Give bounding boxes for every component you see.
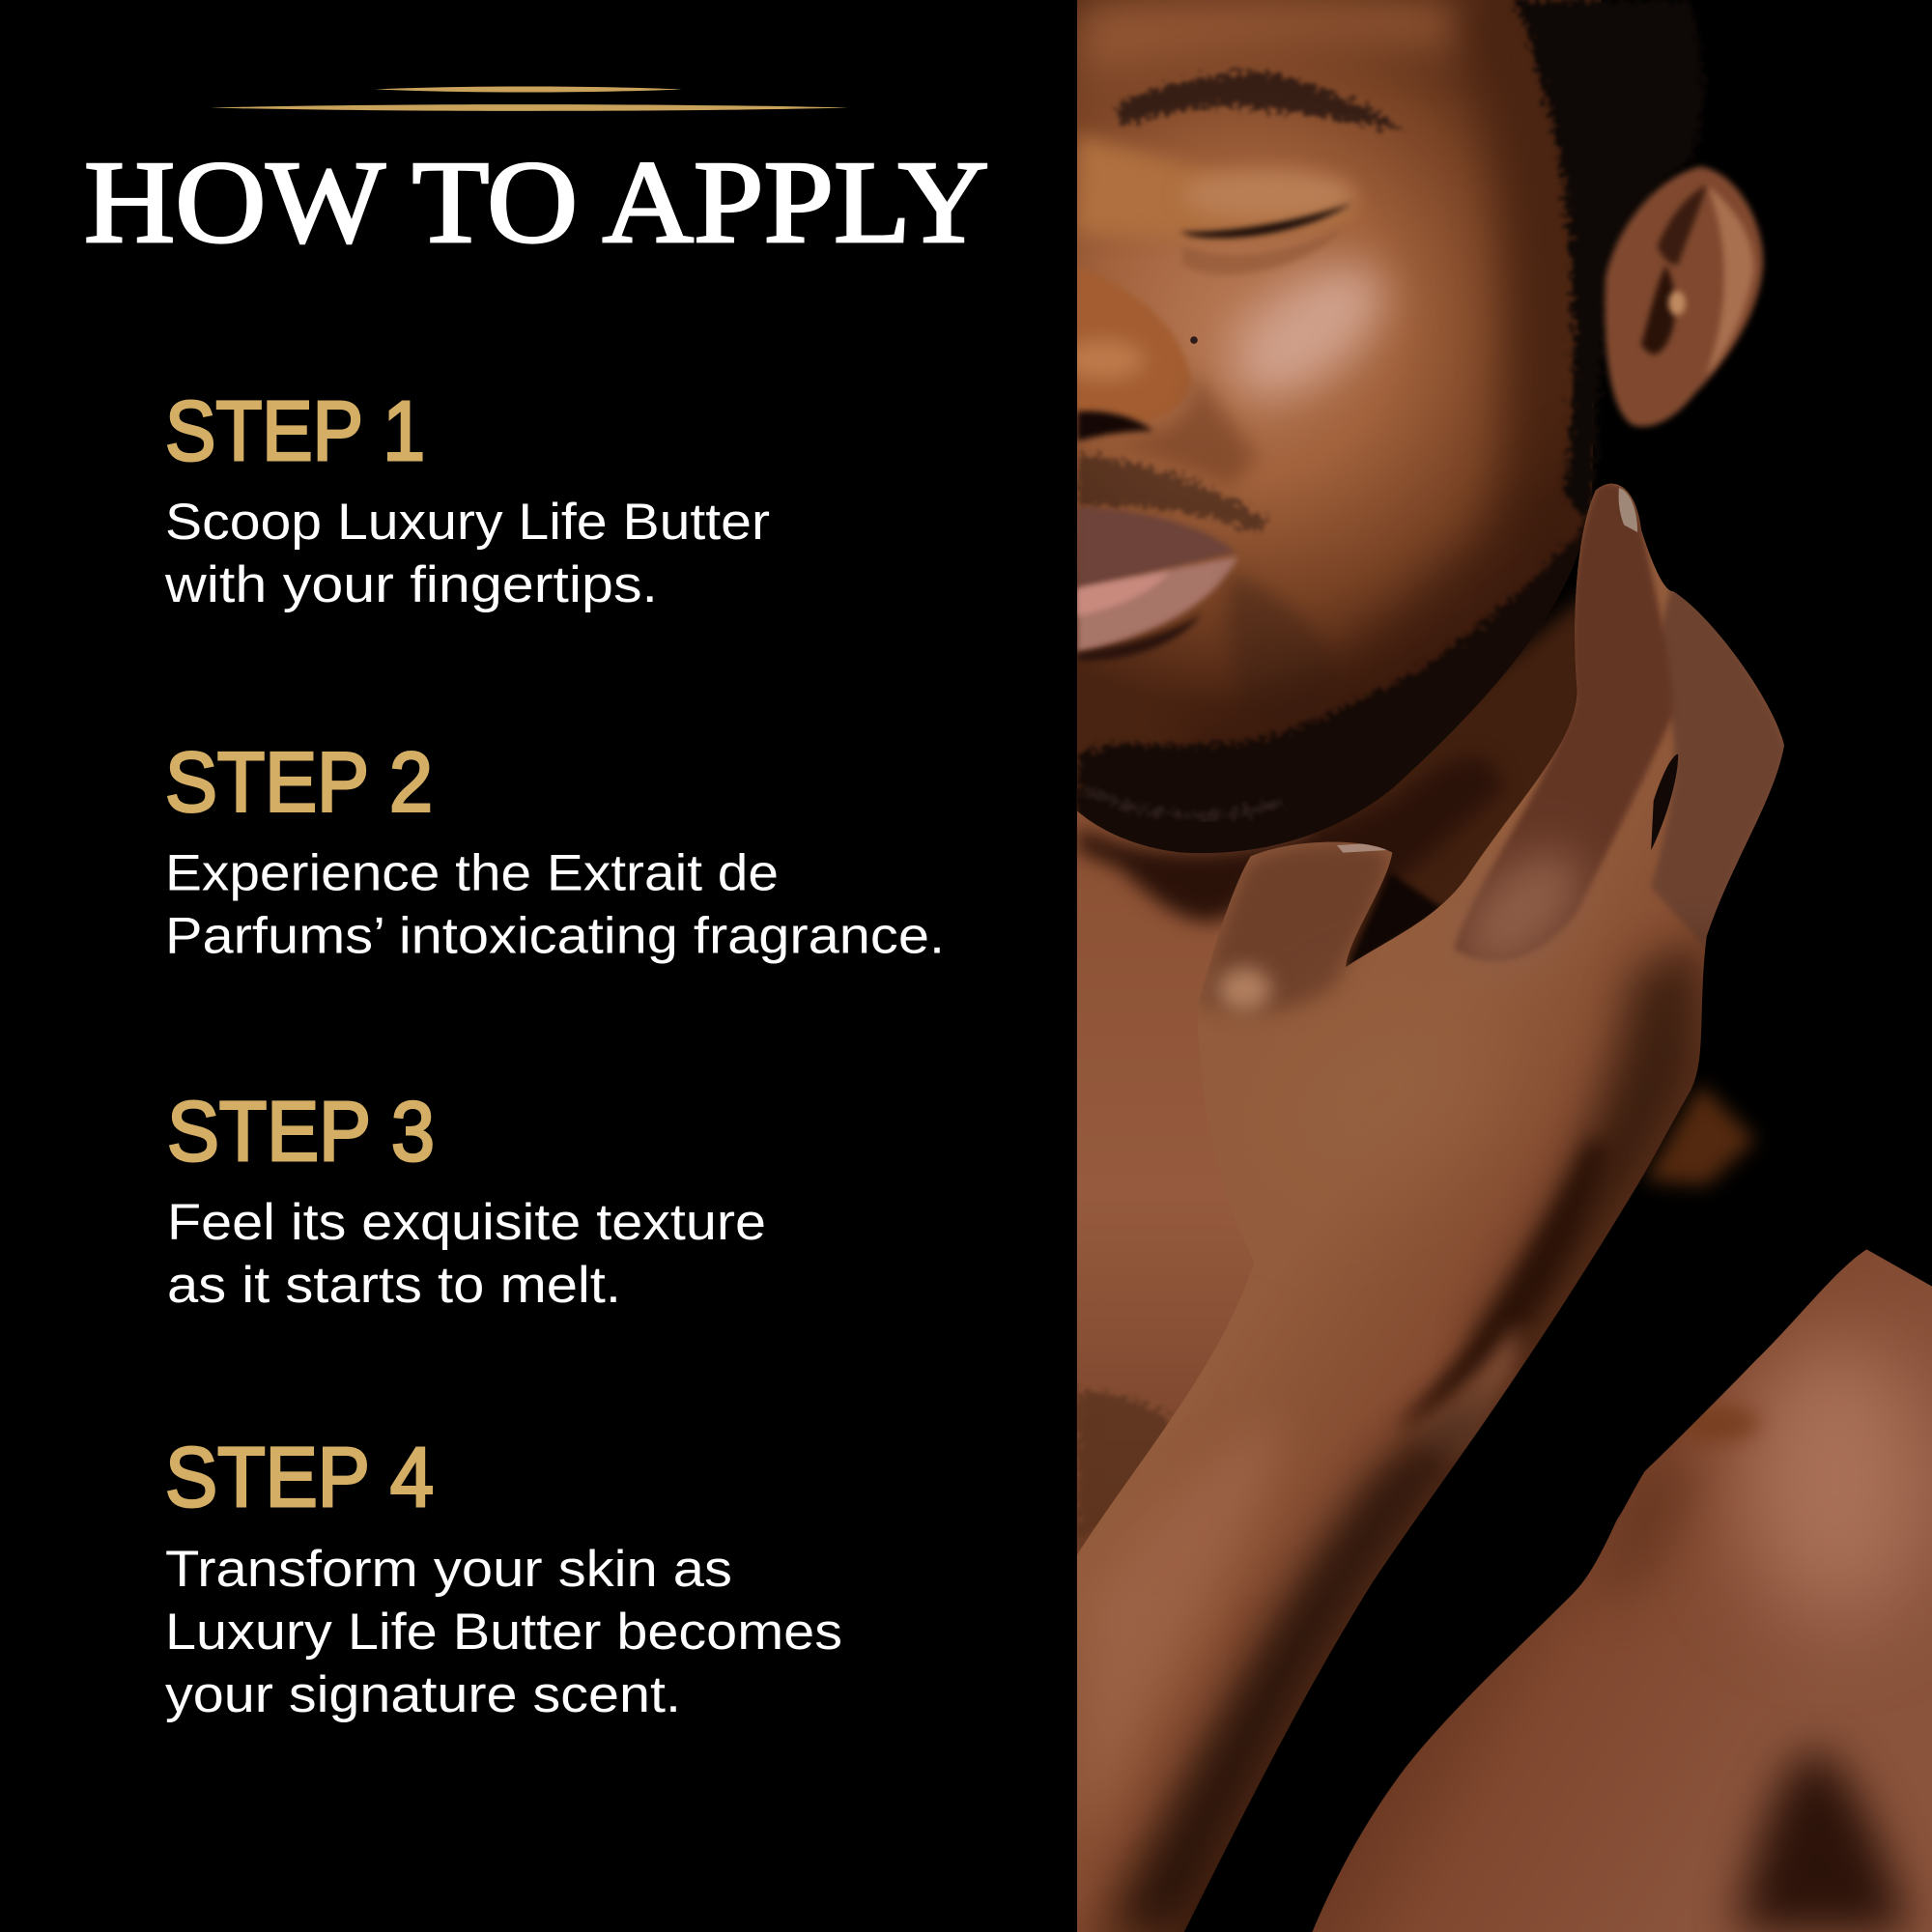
shoulder warm spot bbox=[1680, 1405, 1758, 1441]
forearm shadow side bbox=[1109, 1365, 1523, 1932]
gap between fingers bbox=[1651, 754, 1678, 850]
mole on cheek bbox=[1190, 336, 1198, 344]
step 4 text bbox=[165, 1541, 842, 1723]
step 1 heading: STEP 1 bbox=[165, 384, 425, 478]
photo: man applying butter to neck bbox=[1061, 0, 1932, 1932]
temple shade bbox=[1445, 7, 1578, 520]
fingernail bbox=[1619, 488, 1637, 532]
thumb nail bbox=[1337, 842, 1386, 853]
eyebrow bbox=[1115, 71, 1405, 130]
closed eye lash line bbox=[1180, 203, 1351, 238]
shoulder bbox=[1282, 1233, 1932, 1932]
tendon shadow bbox=[1395, 1139, 1608, 1428]
knuckle highlight bbox=[1439, 830, 1604, 994]
forehead tone bbox=[1077, 0, 1466, 86]
shoulder highlight bbox=[1740, 1337, 1932, 1620]
step 2 heading: STEP 2 bbox=[165, 736, 433, 829]
step 4 text: Transform your skin as bbox=[165, 1541, 732, 1598]
bottom gold line bbox=[211, 104, 848, 111]
brow ridge glow bbox=[1077, 130, 1206, 238]
nose highlight bbox=[1061, 340, 1145, 380]
step 4 heading: STEP 4 bbox=[165, 1431, 434, 1524]
shadow under the chin bbox=[1077, 757, 1503, 922]
step 2 text bbox=[165, 844, 945, 964]
nostril bbox=[1077, 412, 1153, 441]
step 2 text: Experience the Extrait de bbox=[165, 844, 779, 902]
step 1 text: with your fingertips. bbox=[164, 556, 658, 613]
lower lip pink tint bbox=[1077, 572, 1171, 616]
thumb bbox=[1202, 842, 1392, 1013]
chest hair bbox=[1077, 1392, 1180, 1547]
wrist bone light bbox=[1417, 1324, 1517, 1460]
forearm highlight bbox=[1077, 1417, 1282, 1848]
step 1 text bbox=[164, 494, 770, 613]
step 2 bbox=[165, 736, 945, 964]
neck in shade behind the fingers bbox=[1306, 591, 1602, 974]
step 1 text: Scoop Luxury Life Butter bbox=[165, 494, 770, 551]
step 2 text: Parfums’ intoxicating fragrance. bbox=[165, 908, 945, 964]
beard lighter hairs bbox=[1084, 788, 1282, 816]
step 3 text: Feel its exquisite texture bbox=[167, 1194, 766, 1251]
hand edge shadow bbox=[1472, 936, 1707, 1365]
step 1 bbox=[164, 384, 770, 613]
photo black backdrop bbox=[1077, 0, 1932, 1932]
ear bbox=[1605, 166, 1763, 427]
back finger bbox=[1651, 579, 1786, 949]
thumb knuckle highlight bbox=[1217, 967, 1271, 1011]
step 3 text: as it starts to melt. bbox=[167, 1257, 621, 1314]
step 3 heading: STEP 3 bbox=[167, 1085, 435, 1179]
sparse stubble patch bbox=[1227, 573, 1337, 724]
title: HOW TO APPLY bbox=[84, 137, 989, 268]
ear inner shadow bbox=[1641, 265, 1675, 355]
ear glint bbox=[1668, 291, 1686, 316]
back of hand glow bbox=[1234, 966, 1526, 1228]
nasolabial shadow bbox=[1109, 370, 1257, 487]
step 3 bbox=[167, 1085, 766, 1314]
ear outer bbox=[1605, 166, 1763, 427]
ear top shadow bbox=[1658, 185, 1707, 265]
index finger bbox=[1454, 483, 1673, 961]
mouth shadow bbox=[1077, 613, 1202, 661]
nose body bbox=[1077, 265, 1191, 425]
step 4 bbox=[165, 1431, 842, 1723]
beard bbox=[1077, 518, 1592, 868]
step 3 text bbox=[167, 1194, 766, 1314]
decorative gold lines bbox=[211, 87, 848, 111]
eyelid bbox=[1182, 170, 1355, 219]
under-eye shade bbox=[1182, 228, 1343, 274]
face bbox=[1061, 0, 1606, 868]
cheek highlight bbox=[1209, 239, 1407, 422]
hair bbox=[1516, 0, 1704, 529]
hand and forearm bbox=[1077, 469, 1816, 1932]
lower lip bbox=[1077, 557, 1238, 653]
dark gap beside the thumb bbox=[1346, 872, 1444, 971]
moustache bbox=[1077, 453, 1269, 532]
armpit shadow bbox=[1737, 1749, 1910, 1932]
step 4 text: Luxury Life Butter becomes bbox=[165, 1604, 842, 1661]
chest and neck skin bbox=[1076, 788, 1352, 1602]
ear rim light bbox=[1705, 185, 1753, 376]
upper lip bbox=[1077, 508, 1236, 591]
top gold line bbox=[375, 87, 682, 93]
step 4 text: your signature scent. bbox=[165, 1666, 681, 1723]
beard halo bbox=[1182, 419, 1596, 801]
neck rim light bbox=[1645, 1084, 1756, 1185]
shoulder shadow band bbox=[1604, 1459, 1702, 1596]
